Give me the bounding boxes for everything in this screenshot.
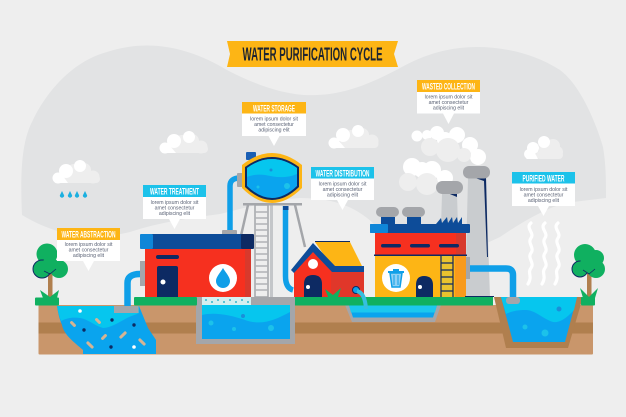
label: wasted collection: amet consectetur	[429, 100, 469, 106]
factory	[370, 207, 470, 297]
label: purified water: adipiscing elit	[528, 198, 560, 204]
label: water abstraction: amet consectetur	[69, 248, 109, 254]
cooling tower: large	[463, 166, 490, 297]
label: water storage	[242, 102, 306, 146]
cloud top left	[160, 131, 208, 154]
label: water distribution: lorem ipsum dolor sit	[319, 182, 367, 188]
label: water abstraction: lorem ipsum dolor sit	[65, 242, 113, 248]
storage basin	[196, 297, 295, 344]
red treatment building	[140, 230, 254, 297]
ground	[38, 305, 593, 354]
label: purified water: PURIFIED WATER	[522, 174, 565, 184]
label: wasted collection: adipiscing elit	[433, 106, 465, 112]
tree left	[33, 244, 68, 298]
clouds	[52, 125, 563, 184]
title banner: WATER PURIFICATION CYCLE	[242, 44, 382, 64]
label: water treatment: amet consectetur	[155, 206, 195, 212]
label: water abstraction	[57, 228, 120, 271]
cooling tower: small	[436, 181, 463, 260]
cloud centre	[328, 125, 378, 148]
polluted water source	[57, 306, 156, 354]
ladder	[255, 205, 268, 297]
water tower	[230, 152, 305, 297]
icon: rain drops	[60, 191, 87, 198]
label: water distribution: amet consectetur	[323, 187, 363, 193]
red house	[291, 242, 366, 309]
background blob	[21, 46, 606, 243]
label: water storage: WATER STORAGE	[253, 104, 295, 114]
label: water storage: amet consectetur	[254, 122, 294, 128]
label: wasted collection: WASTED COLLECTION	[422, 82, 475, 92]
ladder	[441, 256, 453, 297]
label: water treatment: WATER TREATMENT	[150, 186, 199, 196]
label: water distribution: WATER DISTRIBUTION	[316, 168, 370, 178]
icon: trash can badge	[382, 264, 410, 292]
label: water storage: adipiscing elit	[258, 128, 290, 134]
label: water distribution	[311, 167, 374, 210]
label: water treatment: lorem ipsum dolor sit	[151, 200, 199, 206]
label: wasted collection: lorem ipsum dolor sit	[425, 94, 473, 100]
steam lines	[528, 223, 559, 284]
centre settling pond	[345, 305, 441, 322]
icon: water drop badge	[209, 264, 237, 292]
smoke clouds	[399, 126, 486, 195]
pipe: factory to purified pond	[470, 268, 513, 297]
label: wasted collection	[417, 80, 480, 124]
label: water abstraction: WATER ABSTRACTION	[62, 230, 116, 240]
label: water treatment	[143, 185, 206, 229]
label: water treatment: adipiscing elit	[159, 211, 191, 217]
tree right	[572, 244, 605, 298]
cloud right	[524, 136, 563, 159]
label: purified water	[512, 172, 575, 216]
pipe: abstraction to treatment	[128, 274, 140, 306]
label: water distribution: adipiscing elit	[327, 192, 359, 198]
label: purified water: amet consectetur	[524, 192, 564, 198]
label: water storage: lorem ipsum dolor sit	[250, 116, 298, 122]
label: water abstraction: adipiscing elit	[73, 253, 105, 259]
label: purified water: lorem ipsum dolor sit	[520, 187, 568, 193]
title banner	[227, 41, 398, 67]
grass strips	[35, 297, 595, 306]
purified water pond	[494, 297, 583, 348]
cloud near rain	[52, 160, 100, 184]
